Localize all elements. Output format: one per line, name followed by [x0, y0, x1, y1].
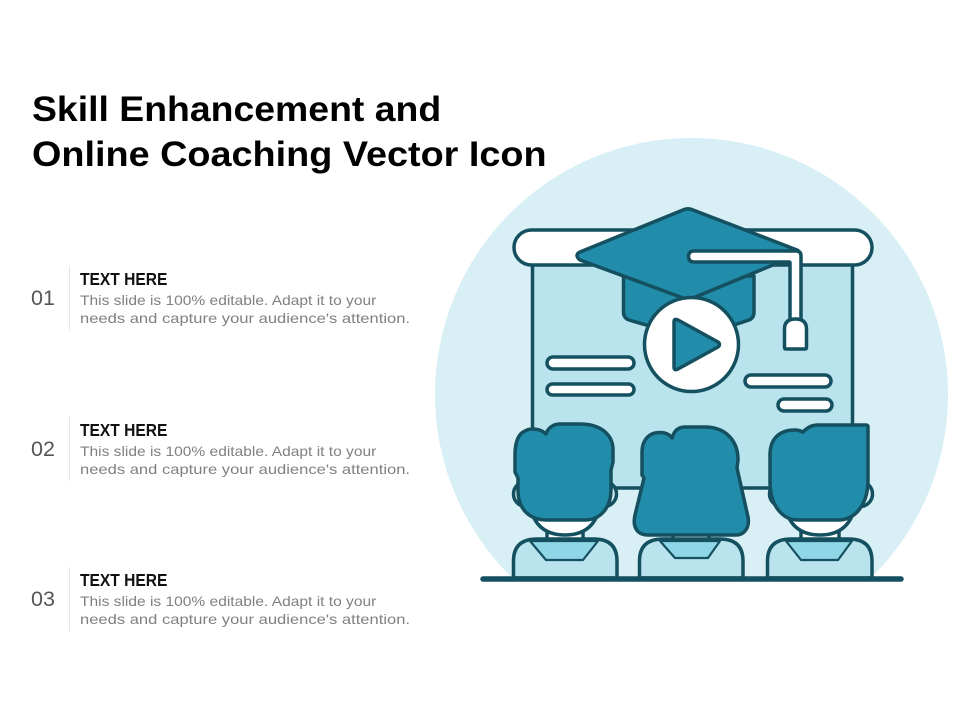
heading 02: TEXT HERE	[80, 420, 167, 440]
student left	[514, 424, 617, 578]
title: Online Coaching Vector Icon	[32, 135, 547, 174]
floor line	[483, 576, 901, 582]
body text 03: This slide is 100% editable. Adapt it to your	[80, 593, 376, 609]
number 01: 01	[31, 286, 55, 310]
title	[32, 90, 547, 174]
face	[529, 500, 601, 535]
ears	[770, 482, 794, 506]
background circle	[435, 138, 948, 576]
presentation screen	[514, 230, 872, 488]
collar	[530, 541, 598, 560]
neck	[801, 525, 839, 545]
body	[640, 539, 743, 578]
text block 03	[31, 567, 410, 631]
title: Skill Enhancement and	[32, 90, 441, 129]
body	[514, 539, 617, 578]
body text 01: This slide is 100% editable. Adapt it to your	[80, 292, 376, 308]
text block 01	[31, 266, 410, 330]
number 03: 03	[31, 587, 55, 611]
body text 02	[80, 443, 410, 477]
body text 01	[80, 292, 410, 326]
cap base	[624, 276, 754, 329]
collar	[660, 541, 720, 558]
body text 03: needs and capture your audience's attention.	[80, 611, 410, 627]
body	[768, 539, 872, 578]
collar	[786, 541, 852, 560]
body text 02: This slide is 100% editable. Adapt it to your	[80, 443, 376, 459]
student right	[768, 425, 872, 578]
tassel	[784, 319, 806, 349]
student middle	[634, 427, 748, 578]
graduation cap	[577, 209, 806, 349]
tassel cord	[688, 251, 801, 320]
screen roller	[514, 230, 872, 265]
illustration: online coaching	[435, 138, 948, 582]
neck	[673, 525, 709, 545]
body text 03	[80, 593, 410, 627]
play triangle	[674, 319, 720, 370]
body text 02: needs and capture your audience's attention.	[80, 461, 410, 477]
hair	[770, 425, 868, 520]
text block 02	[31, 417, 410, 481]
hair	[515, 424, 613, 520]
mortarboard	[577, 209, 799, 299]
play button	[644, 298, 738, 392]
number 02: 02	[31, 437, 55, 461]
heading 03: TEXT HERE	[80, 570, 167, 590]
text lines left	[547, 357, 634, 395]
ears	[514, 482, 538, 506]
neck	[547, 525, 583, 545]
body text 01: needs and capture your audience's attention.	[80, 310, 410, 326]
heading 01: TEXT HERE	[80, 269, 167, 289]
face	[784, 500, 856, 535]
text lines right	[745, 375, 832, 411]
hair	[634, 427, 748, 535]
